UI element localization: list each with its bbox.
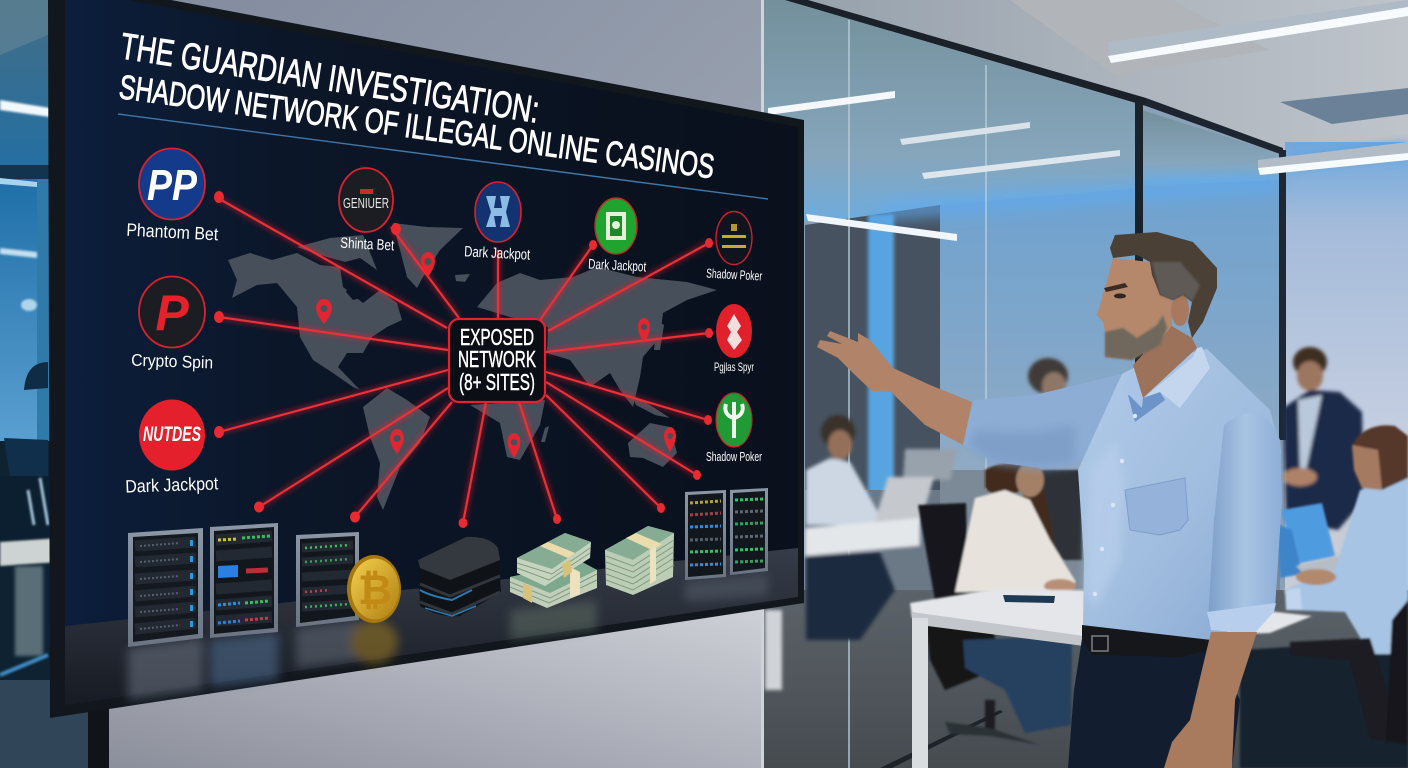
face <box>1097 258 1172 360</box>
ceiling lights <box>768 0 1408 241</box>
world map <box>228 223 717 510</box>
wall below display <box>108 600 761 768</box>
neck <box>1133 325 1197 398</box>
ceiling tile <box>1010 0 1270 75</box>
logo: shadow poker dark <box>706 212 763 283</box>
logo: dark jackpot red: Dark Jackpot <box>125 473 219 497</box>
presenter <box>817 232 1282 768</box>
display mount post <box>88 708 109 768</box>
ear <box>1171 294 1189 326</box>
display screen <box>65 0 798 705</box>
logo: dark jackpot blue: Dark Jackpot <box>464 243 531 264</box>
arctic islands <box>297 235 377 270</box>
logo: shinta bet <box>339 168 395 254</box>
logo: shinta bet: Shinta Bet <box>340 235 395 254</box>
logo: phantom bet <box>126 148 219 244</box>
shelf reflections <box>128 574 768 700</box>
bitcoin coin <box>347 555 401 623</box>
wall around display <box>50 0 761 640</box>
foreground desk <box>910 589 1312 768</box>
grey hair at temple <box>1152 262 1200 302</box>
collar left <box>1122 368 1143 408</box>
upper bundle <box>517 533 591 586</box>
logo: phantom bet: PP <box>147 161 198 210</box>
network lines glow <box>216 197 709 523</box>
logo: crypto spin <box>131 276 213 372</box>
logo: dark jackpot green <box>588 198 647 275</box>
logo: shadow poker dark: Shadow Poker <box>706 266 763 283</box>
network lines <box>216 197 709 523</box>
logo: crypto spin: Crypto Spin <box>131 351 213 372</box>
logo: dark jackpot red: NUTDES <box>143 423 201 446</box>
server rack 4 <box>685 490 726 580</box>
title: THE GUARDIAN INVESTIGATION: <box>118 25 542 131</box>
network end dots <box>214 191 713 528</box>
bitcoin coin: ₿ <box>358 566 392 613</box>
map pins <box>316 252 676 458</box>
hudson bay <box>346 284 365 300</box>
rolled cuff <box>1207 603 1276 634</box>
trousers <box>1068 632 1240 768</box>
glass frames <box>785 0 1146 106</box>
central hub: exposed network: NETWORK <box>458 346 536 372</box>
stacked wallets <box>418 537 501 616</box>
left sleeve <box>963 374 1145 468</box>
hair <box>1110 232 1217 338</box>
background: right office glass room <box>761 0 1408 768</box>
background: seated woman and chair <box>918 463 1082 745</box>
collar right <box>1145 347 1210 408</box>
glass upper section <box>763 0 1140 225</box>
logo: dark jackpot red <box>125 400 219 497</box>
background: standing man in navy suit <box>1283 347 1364 530</box>
inner collar <box>1128 392 1165 422</box>
central hub: exposed network: (8+ SITES) <box>459 369 535 395</box>
glass lower section <box>940 188 1140 500</box>
cash stacks right <box>605 526 674 595</box>
beard <box>1105 315 1167 360</box>
logo: pgjlas spyr <box>714 304 754 374</box>
shirt buttons <box>1093 414 1137 596</box>
logo: crypto spin: P <box>155 285 189 341</box>
lower bundle <box>510 562 597 608</box>
ceiling <box>763 0 1408 175</box>
logo: pgjlas spyr: Pgjlas Spyr <box>714 360 754 374</box>
right sleeve <box>1208 413 1282 630</box>
display bezel <box>48 0 804 718</box>
server rack 1 <box>128 528 203 647</box>
south america <box>363 388 430 510</box>
background: man reflected behind glass <box>1022 358 1080 420</box>
africa <box>470 400 545 460</box>
sleeve fold shading <box>968 425 1075 468</box>
eurasia <box>477 267 717 407</box>
southeast asia islands <box>632 395 670 418</box>
greenland <box>393 223 463 288</box>
torso fold shading <box>1085 440 1125 610</box>
logo: phantom bet: Phantom Bet <box>126 220 219 244</box>
logo: shadow poker green <box>706 393 762 464</box>
background: man at laptop behind glass <box>765 415 957 690</box>
australia <box>628 423 677 467</box>
display shelf surface <box>65 548 798 705</box>
logo: dark jackpot blue <box>464 182 531 264</box>
floor <box>763 590 1408 768</box>
lower arm and hand <box>1164 632 1257 768</box>
shirt pocket <box>1125 478 1188 535</box>
logo: shinta bet: GENIUER <box>343 195 389 212</box>
server rack 5 <box>730 488 768 575</box>
eye and brow <box>1104 283 1128 298</box>
central hub: exposed network <box>449 319 545 402</box>
torso <box>1078 349 1281 640</box>
iceland <box>455 274 470 282</box>
logo: shadow poker green: Shadow Poker <box>706 449 762 464</box>
server rack 2 <box>210 523 278 638</box>
background: seated man with laptop <box>1240 425 1408 768</box>
blue glow band <box>880 178 1280 218</box>
madagascar <box>541 426 549 442</box>
belt <box>1082 625 1211 657</box>
server rack 3 <box>296 532 359 627</box>
central hub: exposed network: EXPOSED <box>460 324 534 350</box>
logo: dark jackpot green: Dark Jackpot <box>588 256 647 275</box>
north america <box>228 253 402 390</box>
wall display <box>48 0 804 718</box>
cash stacks left <box>510 533 597 608</box>
raised forearm and hand <box>817 331 972 445</box>
title: SHADOW NETWORK OF ILLEGAL ONLINE CASINOS <box>117 68 717 186</box>
japan <box>654 320 664 350</box>
background: left office through glass <box>0 0 110 768</box>
